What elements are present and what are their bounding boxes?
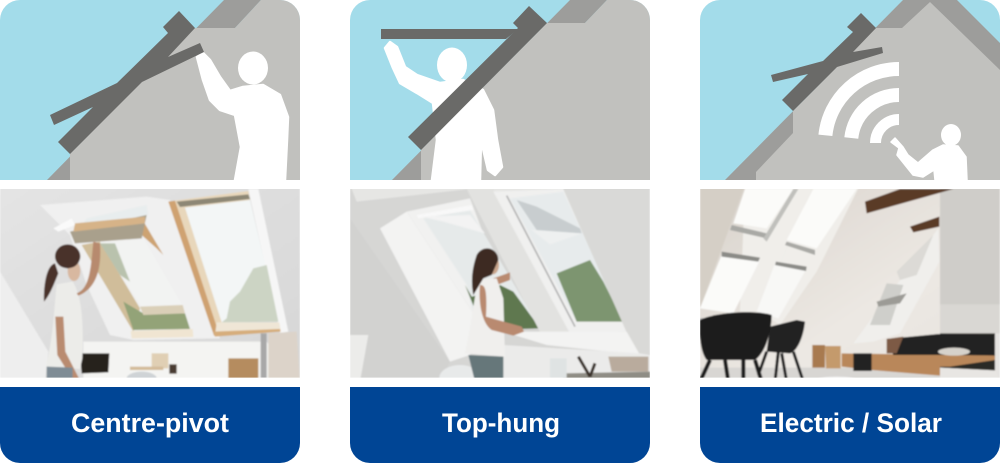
wood frame of right window (168, 201, 221, 336)
right window (493, 189, 627, 333)
label: centre-pivot (0, 387, 300, 463)
illustration: centre-pivot window (0, 0, 300, 180)
illustration: top-hung window (350, 0, 650, 180)
panel: top-hung (350, 0, 650, 463)
black chairs (767, 320, 805, 353)
label: centre-pivot: Centre-pivot (71, 408, 229, 438)
panel: centre-pivot (0, 0, 300, 463)
label: electric / solar: Electric / Solar (760, 408, 942, 438)
photo: woman opening centre-pivot window (0, 185, 300, 385)
illustration: remote controlled window (700, 0, 1000, 180)
icon: wireless signal arcs (825, 69, 899, 143)
panel: electric / solar (700, 0, 1000, 463)
photo: woman at top-hung window (350, 185, 650, 390)
pillar (468, 190, 568, 332)
label: top-hung (350, 387, 650, 463)
white reveal (380, 212, 477, 362)
left window (80, 205, 148, 228)
label: electric / solar (700, 387, 1000, 463)
left glass (425, 212, 532, 316)
woman (468, 355, 503, 382)
label: top-hung: Top-hung (442, 408, 560, 438)
photo: loft room with electric windows (700, 185, 1000, 383)
woman (46, 282, 83, 369)
desk (83, 341, 269, 378)
